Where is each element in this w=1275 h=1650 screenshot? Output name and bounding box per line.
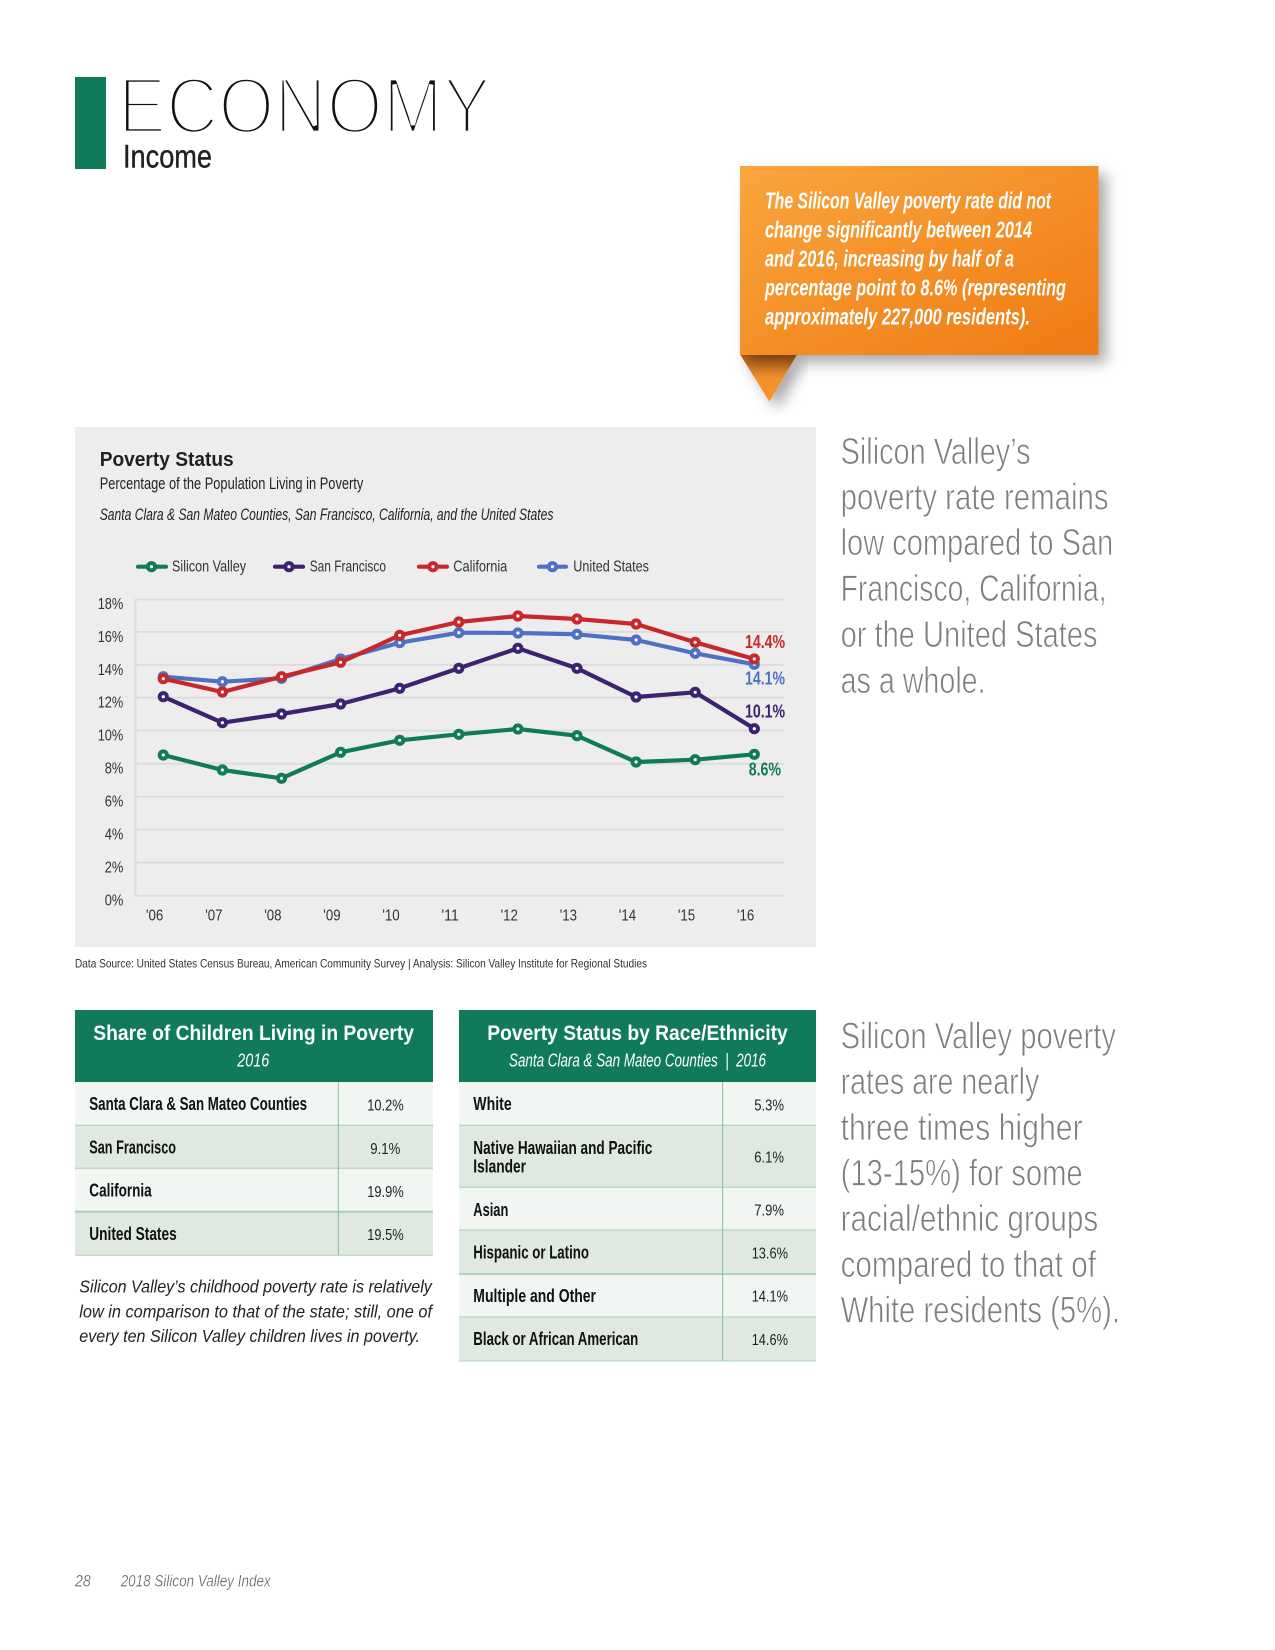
grid lines and axis xyxy=(136,599,784,897)
end value labels: 8.6% xyxy=(749,758,781,780)
table: poverty status by race/ethnicity xyxy=(459,1010,816,1361)
callout text: percentage point to 8.6% (representing xyxy=(764,274,1066,300)
callout box xyxy=(740,166,1098,355)
table rows: Islander xyxy=(473,1156,526,1176)
x axis labels: '12 xyxy=(501,908,518,924)
table: share of children living in poverty xyxy=(75,1010,433,1256)
chart title: Poverty Status xyxy=(100,448,234,471)
x axis labels: '08 xyxy=(264,908,282,924)
series: United States xyxy=(160,629,758,685)
y axis labels: 12% xyxy=(98,695,123,712)
table rows: 19.9% xyxy=(367,1184,404,1201)
note: childhood poverty: Silicon Valley’s childhood poverty rate is relatively xyxy=(79,1277,433,1297)
x axis labels: '15 xyxy=(678,908,695,924)
callout text: approximately 227,000 residents). xyxy=(765,303,1030,329)
series: Silicon Valley xyxy=(160,725,758,782)
table header: Santa Clara & San Mateo Counties | 2016 xyxy=(509,1050,767,1070)
side text: racial and ethnic differences: White residents (5%). xyxy=(841,1290,1120,1331)
callout text: change significantly between 2014 xyxy=(765,216,1032,242)
side text: poverty rate comparison: as a whole. xyxy=(841,660,986,701)
legend: United States xyxy=(573,559,649,576)
side text: poverty rate comparison: Francisco, California, xyxy=(841,568,1107,609)
y axis labels: 14% xyxy=(98,662,123,679)
y axis labels: 2% xyxy=(105,860,123,877)
x axis labels: '14 xyxy=(619,908,636,924)
legend: San Francisco xyxy=(310,559,386,576)
table rows: 14.6% xyxy=(752,1332,788,1349)
table rows: 10.2% xyxy=(367,1097,404,1114)
x axis labels: '09 xyxy=(323,908,341,924)
side text: racial and ethnic differences: three times higher xyxy=(841,1107,1083,1148)
side text: racial and ethnic differences: racial/ethnic groups xyxy=(841,1198,1098,1239)
series: San Francisco xyxy=(160,645,758,732)
side text: poverty rate comparison: low compared to San xyxy=(841,522,1113,563)
panel: poverty status chart xyxy=(75,427,816,947)
side text: racial and ethnic differences xyxy=(841,1015,1120,1331)
table header: Poverty Status by Race/Ethnicity xyxy=(487,1022,788,1045)
x axis labels: '10 xyxy=(382,908,400,924)
note: childhood poverty: low in comparison to that of the state; still, one of xyxy=(79,1301,434,1321)
table header xyxy=(459,1010,816,1082)
table rows: United States xyxy=(89,1224,177,1244)
legend: Silicon Valley xyxy=(172,559,246,576)
table header: 2016 xyxy=(237,1050,270,1070)
y axis labels: 8% xyxy=(105,761,123,778)
table header xyxy=(75,1010,433,1082)
side text: poverty rate comparison xyxy=(841,431,1113,701)
section header xyxy=(75,61,491,175)
y axis labels: 4% xyxy=(105,827,123,844)
callout text: The Silicon Valley poverty rate did not xyxy=(765,187,1052,213)
side text: poverty rate comparison: or the United States xyxy=(841,614,1098,655)
table rows: California xyxy=(89,1181,152,1201)
table rows: 6.1% xyxy=(754,1150,784,1166)
title: ECONOMY: ECONOMY xyxy=(118,61,491,150)
page number: 28 xyxy=(74,1572,91,1591)
table rows: 5.3% xyxy=(754,1097,784,1114)
x axis labels: '06 xyxy=(146,908,163,924)
chart geography note: Santa Clara & San Mateo Counties, San Francisco, California, and the United States xyxy=(100,506,553,524)
table header: Share of Children Living in Poverty xyxy=(93,1022,414,1045)
y axis labels: 18% xyxy=(98,596,123,613)
table rows: 14.1% xyxy=(752,1289,788,1306)
table rows: Native Hawaiian and Pacific xyxy=(473,1138,652,1158)
table rows: 9.1% xyxy=(370,1141,400,1158)
y axis labels: 6% xyxy=(105,794,123,811)
panel background xyxy=(75,427,816,947)
table rows: 13.6% xyxy=(752,1246,788,1263)
x axis labels: '11 xyxy=(442,908,459,924)
legend xyxy=(138,559,649,576)
green accent bar xyxy=(75,77,106,169)
x axis labels: '16 xyxy=(737,908,754,924)
note: childhood poverty: every ten Silicon Valley children lives in poverty. xyxy=(79,1326,420,1346)
y axis labels: 16% xyxy=(98,629,123,646)
series: California xyxy=(160,612,758,696)
table rows: Santa Clara & San Mateo Counties xyxy=(89,1094,307,1114)
y axis labels: 10% xyxy=(98,728,123,745)
side text: poverty rate comparison: Silicon Valley’s xyxy=(841,431,1031,472)
legend: California xyxy=(453,559,507,576)
table rows: Black or African American xyxy=(473,1329,638,1349)
callout: poverty rate summary xyxy=(740,166,1098,402)
footer xyxy=(74,1572,271,1591)
subtitle: Income: Income xyxy=(123,139,212,175)
table rows: Asian xyxy=(473,1200,508,1220)
publication name: 2018 Silicon Valley Index xyxy=(120,1572,271,1591)
x axis labels: '07 xyxy=(205,908,223,924)
side text: poverty rate comparison: poverty rate remains xyxy=(841,477,1109,518)
side text: racial and ethnic differences: rates are nearly xyxy=(841,1061,1040,1102)
end value labels: 14.1% xyxy=(745,668,785,688)
data source note: Data Source: United States Census Bureau, American Community Survey | Analysis: Silicon Valley Institute for Regional Studies xyxy=(75,957,647,971)
table rows: 7.9% xyxy=(754,1203,784,1220)
end value labels xyxy=(745,631,785,780)
side text: racial and ethnic differences: compared to that of xyxy=(841,1244,1097,1285)
chart subtitle: Percentage of the Population Living in Poverty xyxy=(100,475,364,493)
table rows: 19.5% xyxy=(367,1227,404,1244)
x axis labels: '13 xyxy=(560,908,577,924)
table rows: White xyxy=(473,1094,512,1114)
end value labels: 10.1% xyxy=(745,701,785,722)
end value labels: 14.4% xyxy=(745,631,785,652)
callout pointer xyxy=(740,355,797,402)
y axis labels xyxy=(98,596,123,910)
y axis labels: 0% xyxy=(105,893,123,910)
table rows: Hispanic or Latino xyxy=(473,1243,589,1263)
table rows: San Francisco xyxy=(89,1138,176,1158)
side text: racial and ethnic differences: Silicon Valley poverty xyxy=(841,1015,1116,1056)
note: childhood poverty xyxy=(79,1277,434,1346)
table rows: Multiple and Other xyxy=(473,1286,596,1306)
table rows xyxy=(459,1082,816,1361)
callout text xyxy=(764,187,1066,329)
side text: racial and ethnic differences: (13-15%) for some xyxy=(841,1152,1083,1194)
table rows xyxy=(75,1082,433,1256)
callout text: and 2016, increasing by half of a xyxy=(765,245,1014,271)
x axis labels xyxy=(146,908,754,924)
